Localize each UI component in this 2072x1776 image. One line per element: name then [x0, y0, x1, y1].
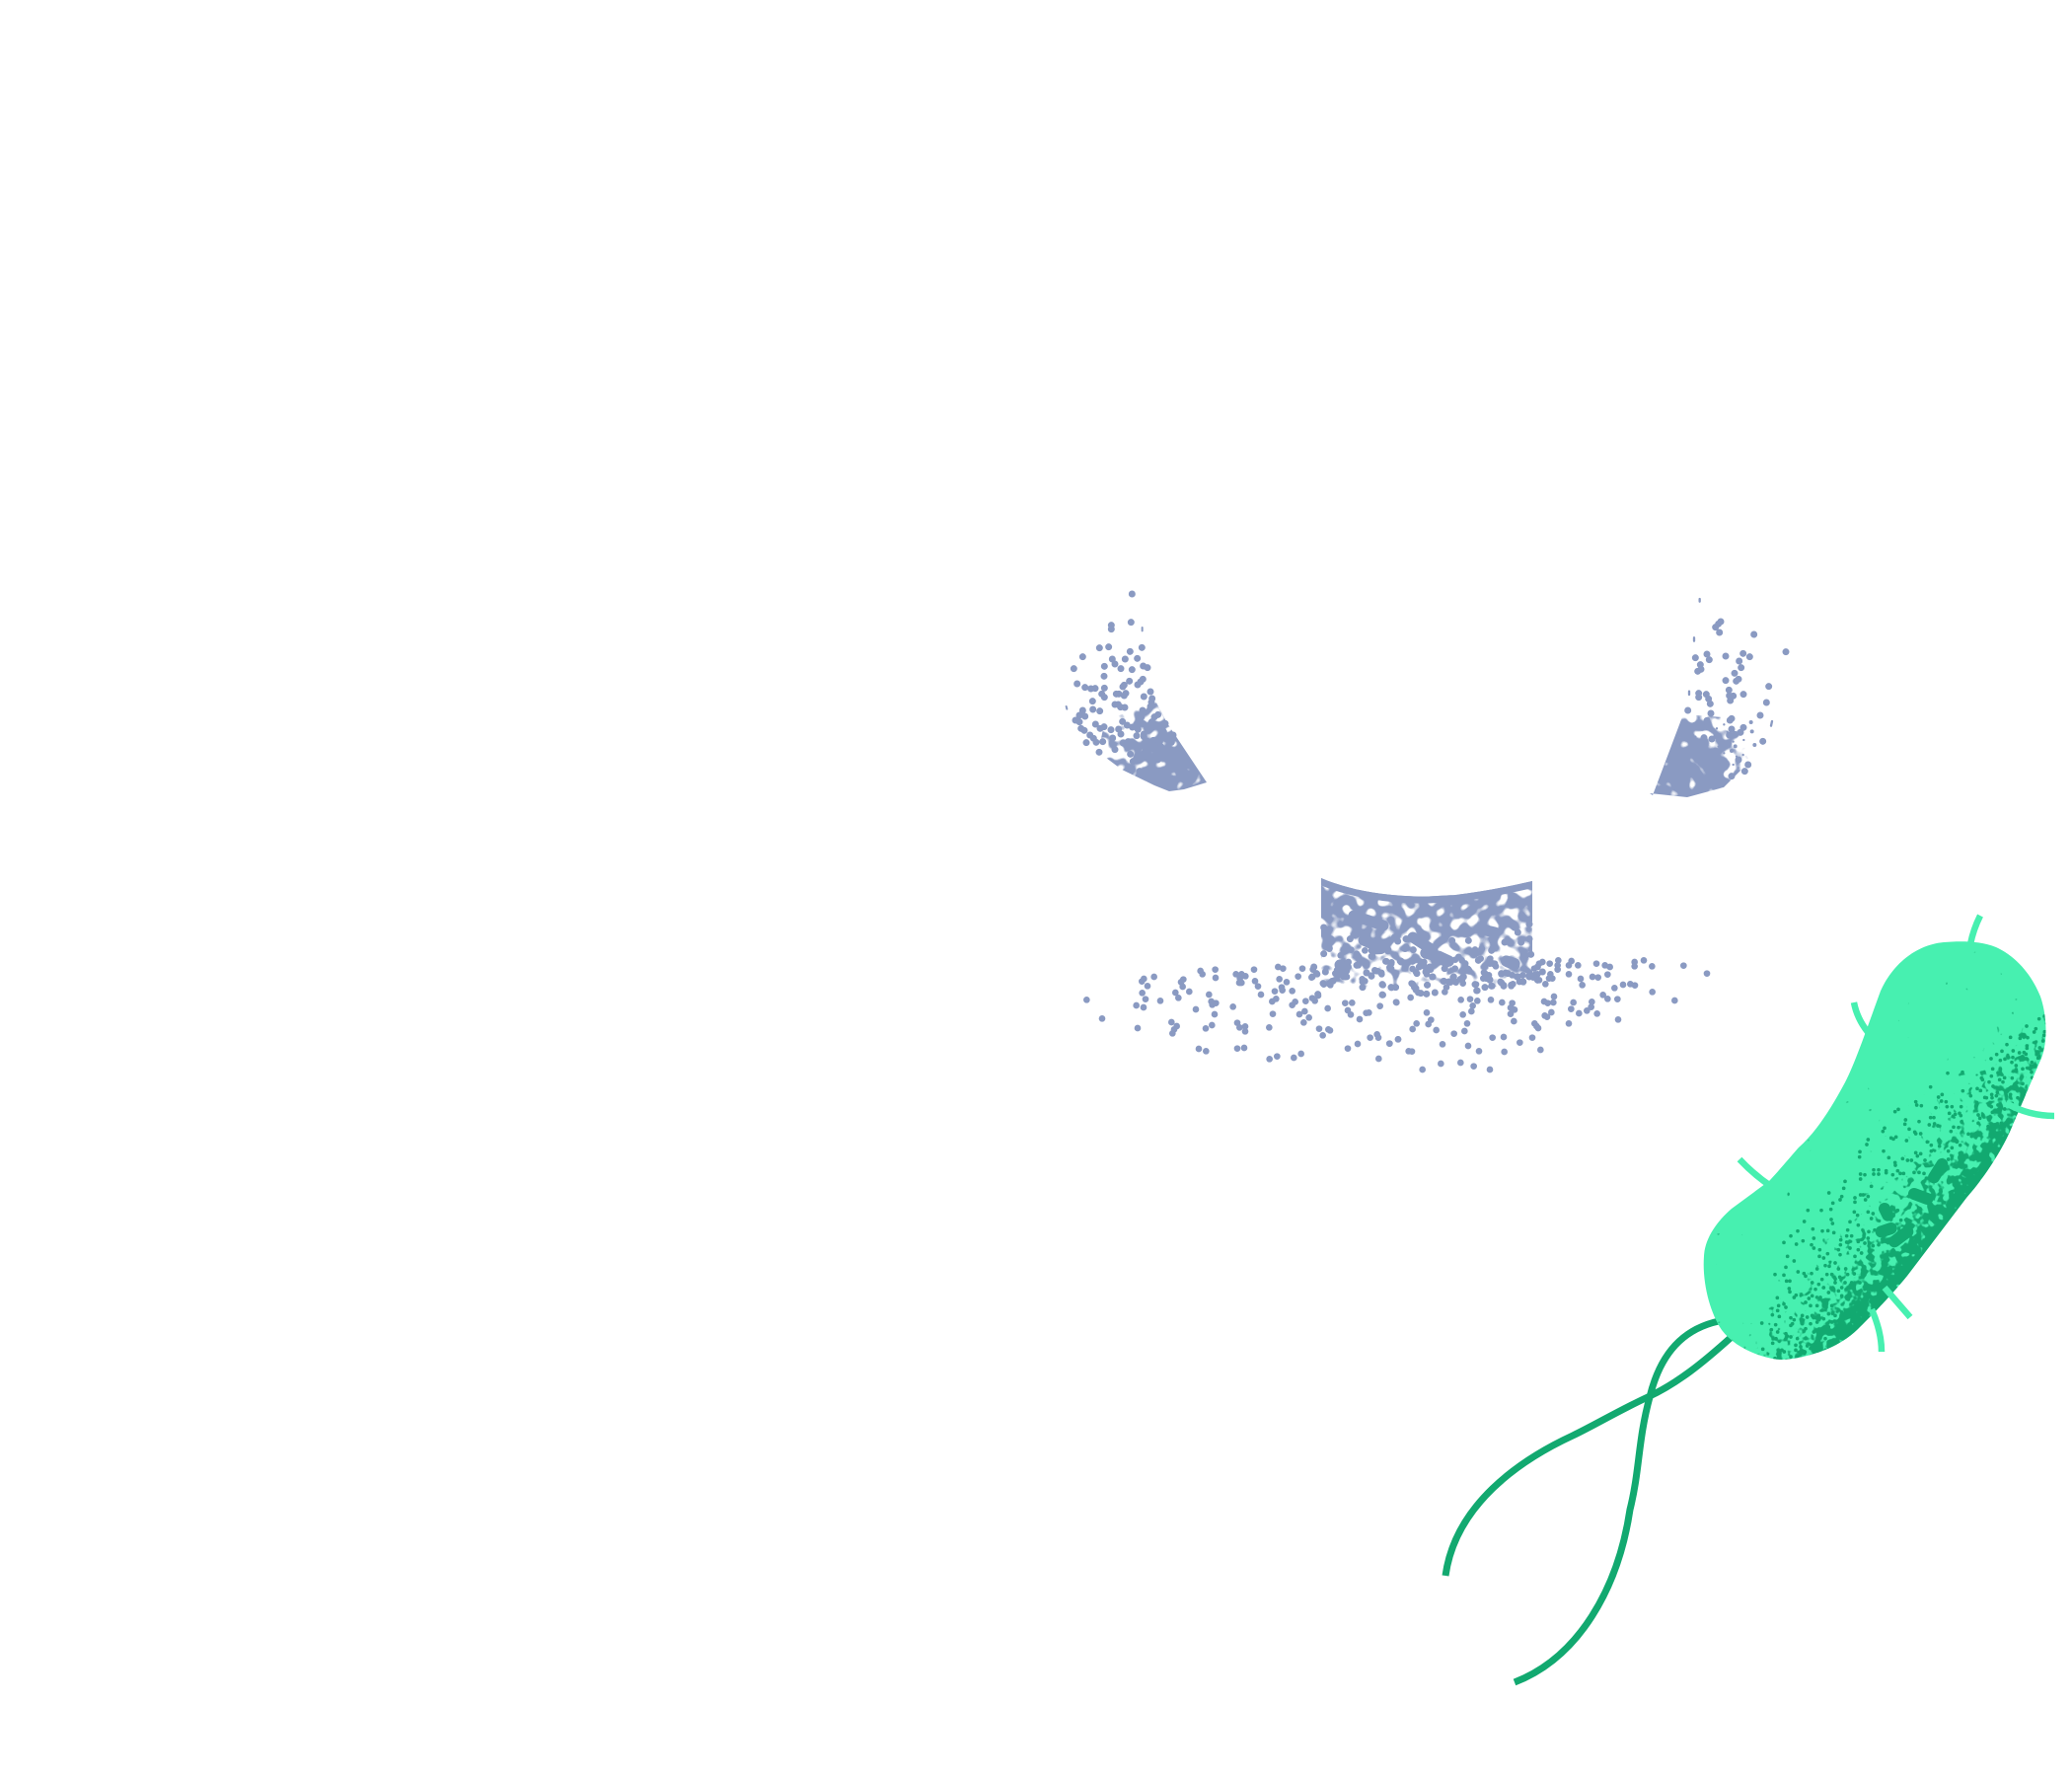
- bacterium pili behind body: [1739, 916, 1980, 1187]
- stippled stomach: scattered dots, left half: [1086, 949, 1400, 1059]
- bacterium flagella: [1445, 1321, 1733, 1682]
- stippled stomach: central dense band: [1312, 868, 1542, 995]
- bacterium shading stipple: [1717, 951, 2046, 1360]
- bacterium body: [1704, 941, 2046, 1360]
- stippled stomach: left shadow: [1067, 594, 1214, 799]
- bacterium pili in front of body: [1872, 1103, 2054, 1352]
- full illustration: [1066, 590, 2054, 1685]
- stippled stomach: right shadow: [1643, 599, 1786, 804]
- stippled stomach: scattered dots, right half: [1383, 949, 1707, 1070]
